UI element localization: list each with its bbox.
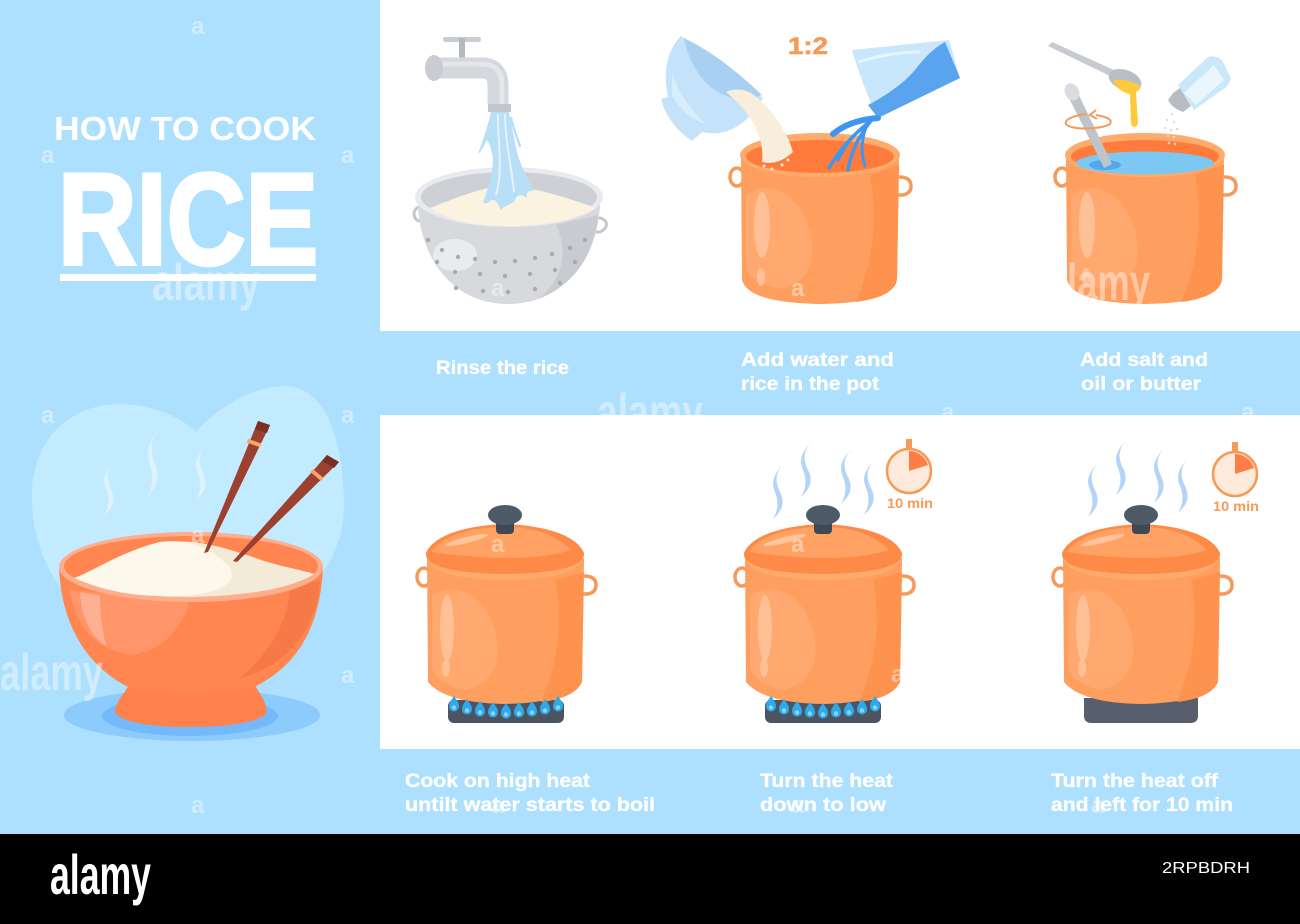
watermarks: a bbox=[191, 522, 205, 549]
icon: tilted bowl bbox=[661, 36, 763, 141]
step labels: Rinse the rice bbox=[436, 358, 569, 379]
illustration: heat off pot bbox=[1053, 440, 1259, 723]
watermarks: a bbox=[1091, 792, 1105, 819]
title: HOW TO COOK bbox=[54, 110, 316, 147]
watermarks: lamy bbox=[1067, 254, 1150, 312]
watermarks: alamy bbox=[597, 384, 703, 442]
step labels: oil or butter bbox=[1081, 374, 1202, 395]
timer bbox=[887, 439, 933, 511]
water stream bbox=[478, 112, 534, 210]
step labels: untilt water starts to boil bbox=[405, 795, 655, 816]
icon: spoon with oil bbox=[1048, 42, 1144, 127]
step labels: rice in the pot bbox=[741, 374, 880, 395]
steam bbox=[773, 442, 874, 519]
footer image id: 2RPBDRH bbox=[1162, 860, 1250, 877]
step labels: down to low bbox=[760, 795, 886, 816]
illustration: pot on low heat bbox=[735, 439, 933, 723]
watermarks: a bbox=[191, 792, 205, 819]
watermarks: a bbox=[491, 792, 505, 819]
rice stream bbox=[726, 90, 793, 170]
watermarks: a bbox=[41, 142, 55, 169]
watermarks: a bbox=[341, 142, 355, 169]
watermarks: a bbox=[41, 402, 55, 429]
watermarks: alamy bbox=[0, 644, 103, 702]
illustration: pot on high heat bbox=[417, 505, 596, 723]
step labels: Add salt and bbox=[1080, 350, 1208, 371]
watermarks: alamy bbox=[152, 254, 260, 312]
title bbox=[54, 110, 318, 292]
timer bbox=[1213, 442, 1259, 514]
timer: 10 min bbox=[887, 495, 933, 511]
watermarks: a bbox=[1241, 399, 1255, 426]
watermarks: a bbox=[491, 275, 505, 302]
icon: measuring cup bbox=[829, 40, 960, 170]
footer logo: alamy bbox=[50, 843, 151, 906]
illustration: faucet over colander bbox=[414, 37, 606, 304]
panel: bottom steps bbox=[380, 415, 1300, 749]
footer bar bbox=[0, 834, 1300, 924]
steam bbox=[1088, 440, 1188, 517]
timer: 10 min bbox=[1213, 498, 1259, 514]
step labels: Cook on high heat bbox=[405, 771, 591, 792]
watermarks: a bbox=[341, 662, 355, 689]
watermarks: a bbox=[491, 531, 505, 558]
watermarks: a bbox=[791, 275, 805, 302]
illustration: add salt and oil bbox=[1048, 42, 1236, 304]
colander bbox=[414, 167, 606, 304]
step labels bbox=[405, 350, 1233, 816]
open pot with water bbox=[1055, 133, 1236, 304]
illustration: bowl of rice with chopsticks bbox=[32, 386, 344, 741]
watermarks: a bbox=[191, 13, 205, 40]
watermarks: a bbox=[341, 402, 355, 429]
text: ratio: 1:2 bbox=[788, 33, 828, 60]
step labels: Turn the heat bbox=[760, 771, 894, 792]
watermarks: a bbox=[891, 661, 905, 688]
open pot bbox=[730, 133, 911, 304]
icon: salt shaker bbox=[1164, 56, 1231, 145]
step labels: Add water and bbox=[741, 350, 894, 371]
icon: stirring spoon bbox=[1062, 81, 1112, 168]
step labels: and left for 10 min bbox=[1051, 795, 1233, 816]
watermarks: a bbox=[791, 792, 805, 819]
step labels: Turn the heat off bbox=[1051, 771, 1219, 792]
icon: faucet bbox=[425, 37, 511, 112]
panel: top steps bbox=[380, 0, 1300, 331]
illustration: add water and rice to pot bbox=[661, 33, 960, 304]
title: RICE bbox=[58, 146, 318, 292]
watermarks: a bbox=[791, 531, 805, 558]
watermarks: a bbox=[941, 399, 955, 426]
